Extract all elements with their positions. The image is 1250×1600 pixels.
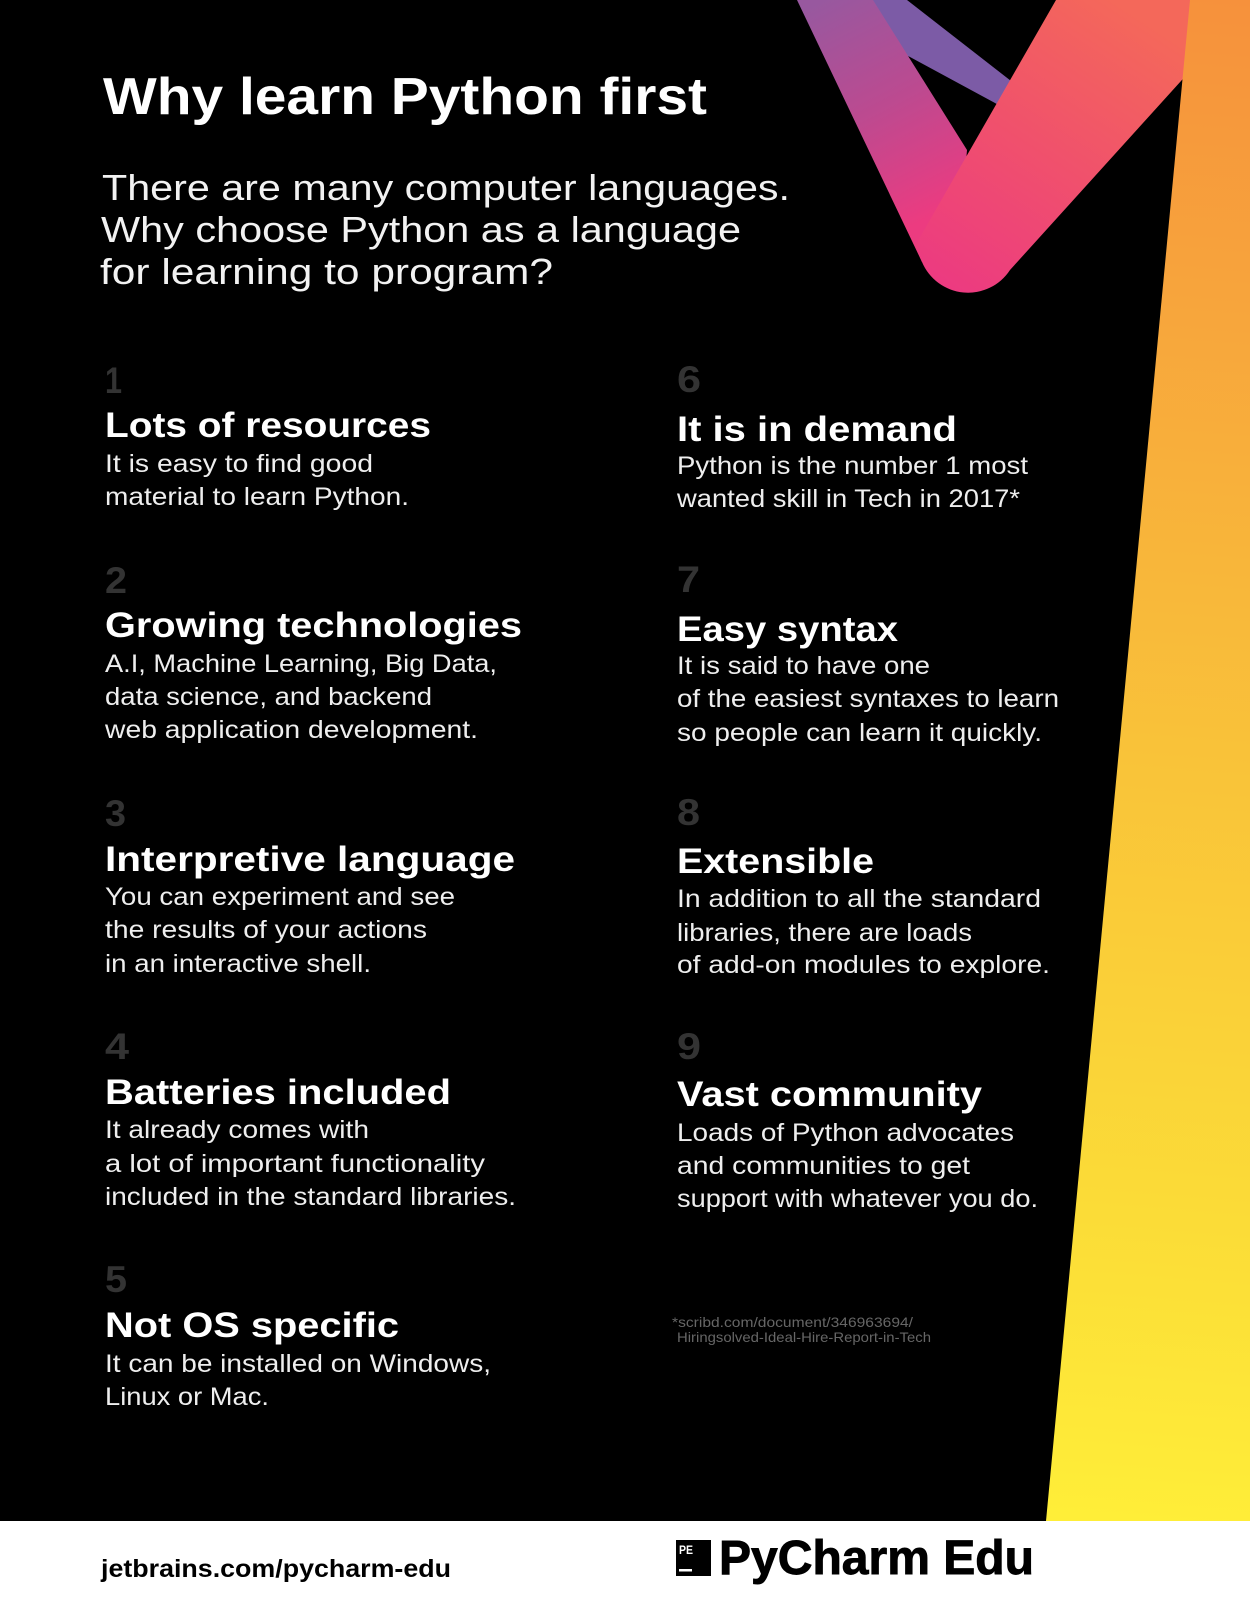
item 7: Easy syntax: 7 (677, 559, 700, 600)
item 2: Growing technologies: data science, and backend (105, 683, 432, 711)
item 2: Growing technologies: 2 (105, 560, 127, 601)
item 1: Lots of resources: material to learn Python. (105, 483, 409, 511)
item 5: Not OS specific: 5 (105, 1259, 127, 1300)
item 6: It is in demand: Python is the number 1 most (677, 452, 1028, 480)
item 4: Batteries included: a lot of important functionality (105, 1150, 486, 1178)
subtitle: Why choose Python as a language (101, 209, 741, 250)
item 4: Batteries included: included in the standard libraries. (105, 1183, 516, 1211)
footnote: *scribd.com/document/346963694/ (672, 1314, 913, 1330)
item 1: Lots of resources: It is easy to find good (105, 450, 373, 478)
item 8: Extensible: In addition to all the standard (677, 885, 1041, 913)
icon: PE square (676, 1540, 711, 1576)
item 2: Growing technologies (104, 560, 522, 744)
item 8: Extensible (677, 792, 1050, 979)
item 6: It is in demand: wanted skill in Tech in 2017* (676, 485, 1020, 513)
item 7: Easy syntax: It is said to have one (677, 652, 930, 680)
logo wordmark: PyCharm Edu (719, 1532, 1034, 1585)
item 3: Interpretive language: 3 (105, 793, 126, 834)
item 9: Vast community: Loads of Python advocates (677, 1119, 1014, 1147)
footer link: jetbrains.com/pycharm-edu (100, 1555, 451, 1583)
logo: PyCharm Edu (676, 1532, 1034, 1585)
item 5: Not OS specific: Not OS specific (105, 1306, 399, 1345)
item 9: Vast community: 9 (677, 1026, 701, 1067)
item 3: Interpretive language: in an interactive shell. (105, 950, 371, 978)
footer bar (0, 1521, 1250, 1600)
item 6: It is in demand: 6 (677, 359, 701, 400)
decoration: orange to yellow slanted band (1046, 0, 1250, 1521)
item 7: Easy syntax: of the easiest syntaxes to learn (677, 685, 1059, 713)
item 7: Easy syntax: Easy syntax (677, 610, 899, 649)
item 2: Growing technologies: A.I, Machine Learning, Big Data, (105, 650, 497, 678)
subtitle: There are many computer languages. (102, 167, 790, 208)
icon: PE square: PE (679, 1543, 693, 1557)
footnote: Hiringsolved-Ideal-Hire-Report-in-Tech (677, 1329, 931, 1345)
item 1: Lots of resources (105, 360, 431, 511)
subtitle (100, 167, 790, 292)
item 5: Not OS specific: It can be installed on Windows, (105, 1350, 491, 1378)
decoration: purple-pink ribbon (797, 0, 967, 262)
item 3: Interpretive language: Interpretive language (105, 840, 515, 879)
item 8: Extensible: 8 (677, 792, 700, 833)
item 2: Growing technologies: Growing technologies (105, 606, 522, 645)
item 4: Batteries included: It already comes with (105, 1116, 369, 1144)
item 8: Extensible: Extensible (677, 842, 874, 881)
decoration: purple ribbon (860, 0, 1020, 112)
item 9: Vast community: Vast community (677, 1075, 983, 1114)
item 5: Not OS specific (105, 1259, 491, 1411)
item 1: Lots of resources: 1 (105, 360, 122, 401)
item 6: It is in demand: It is in demand (677, 410, 957, 449)
item 9: Vast community: and communities to get (677, 1152, 970, 1180)
item 7: Easy syntax: so people can learn it quickly. (677, 719, 1042, 747)
decoration: red-pink ribbon (915, 0, 1200, 293)
item 1: Lots of resources: Lots of resources (105, 406, 431, 445)
item 4: Batteries included: Batteries included (105, 1073, 451, 1112)
item 3: Interpretive language (105, 793, 515, 978)
item 8: Extensible: of add-on modules to explore. (677, 951, 1050, 979)
footnote (672, 1314, 931, 1345)
subtitle: for learning to program? (100, 251, 553, 292)
item 4: Batteries included (105, 1026, 516, 1211)
item 3: Interpretive language: the results of your actions (105, 916, 427, 944)
title: Why learn Python first (103, 68, 707, 126)
item 3: Interpretive language: You can experiment and see (105, 883, 455, 911)
item 9: Vast community: support with whatever you do. (677, 1185, 1038, 1213)
item 9: Vast community (677, 1026, 1038, 1213)
item 7: Easy syntax (677, 559, 1059, 747)
item 2: Growing technologies: web application development. (104, 716, 478, 744)
item 8: Extensible: libraries, there are loads (677, 919, 972, 947)
item 4: Batteries included: 4 (105, 1026, 129, 1067)
item 6: It is in demand (676, 359, 1028, 513)
item 5: Not OS specific: Linux or Mac. (105, 1383, 269, 1411)
